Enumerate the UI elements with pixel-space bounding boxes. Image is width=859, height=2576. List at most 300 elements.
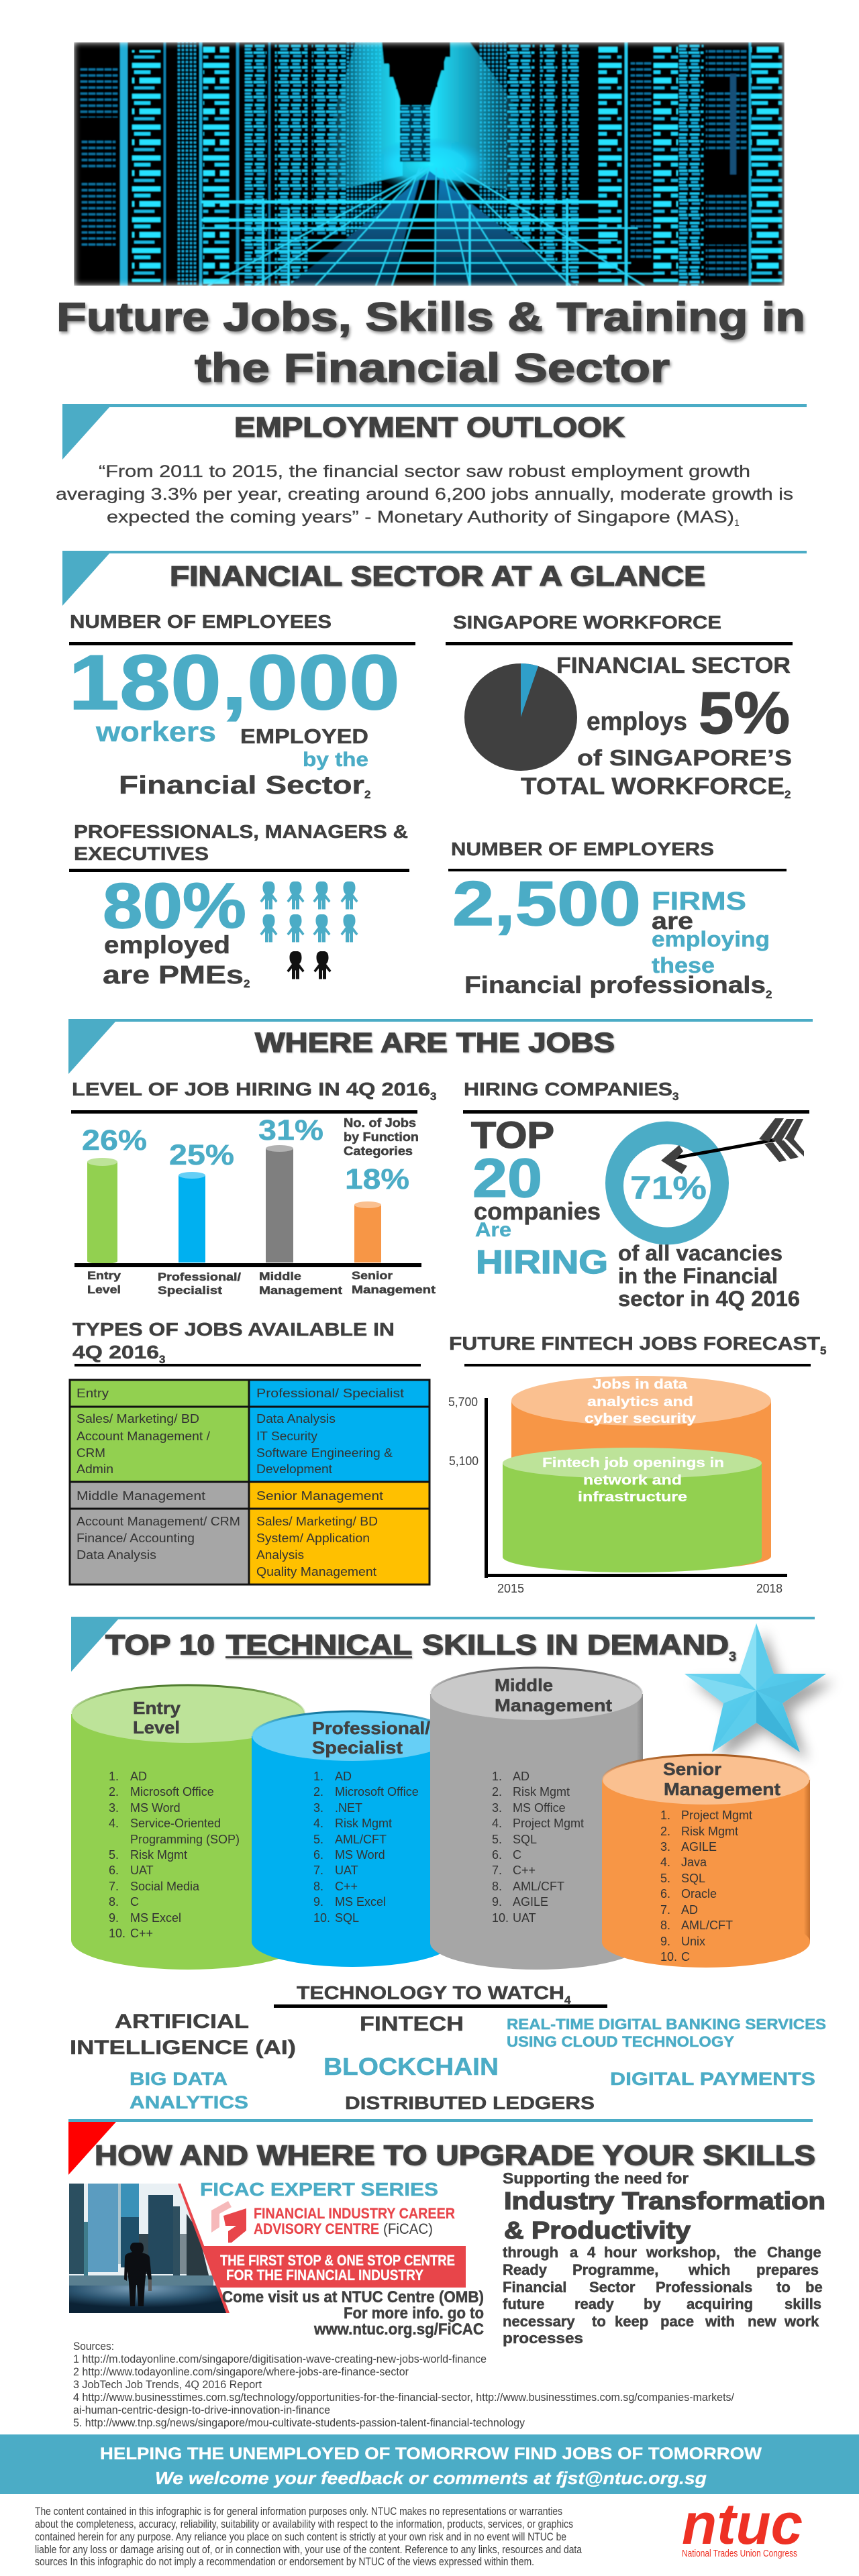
caption: top 20 companies are hiring [471, 1114, 608, 1281]
technology terms: BLOCKCHAIN [323, 2053, 499, 2080]
heading [312, 1718, 430, 1758]
skill list: Project Mgmt [681, 1809, 752, 1822]
skill list: SQL [681, 1872, 705, 1885]
skill list: C [681, 1950, 690, 1964]
axis labels: 5,700 [448, 1395, 478, 1409]
skill list: 8. [492, 1880, 502, 1893]
chart note [344, 1116, 419, 1158]
panel: industry transformation: by [644, 2296, 661, 2312]
visit details: For more info. go to [344, 2304, 484, 2322]
logo text: ADVISORY CENTRE [254, 2220, 379, 2237]
skill list: 8. [660, 1919, 670, 1932]
heading: HOW AND WHERE TO UPGRADE YOUR SKILLS [95, 2139, 815, 2171]
panel: industry transformation: Programme, [572, 2261, 658, 2278]
caption: of all vacancies: of all vacancies [618, 1241, 782, 1265]
bar: middle management [266, 1145, 293, 1263]
caption: these [652, 953, 715, 977]
skill list: 2. [109, 1785, 119, 1799]
cylinder chart [448, 1376, 787, 1595]
skill list: 9. [492, 1895, 502, 1909]
panel: industry transformation: pace [660, 2313, 694, 2330]
axis labels [87, 1269, 436, 1297]
logo text: (FiCAC) [383, 2220, 433, 2237]
axis labels: 2015 [497, 1582, 524, 1595]
technology terms: INTELLIGENCE (AI) [70, 2037, 296, 2059]
technology terms: REAL-TIME DIGITAL BANKING SERVICES [507, 2016, 826, 2033]
percentages: 18% [345, 1163, 409, 1195]
heading [663, 1759, 780, 1799]
jobs table: Admin [77, 1462, 113, 1476]
panel: industry transformation: skills [785, 2296, 821, 2312]
icon: people [260, 881, 358, 979]
logo: FiCAC mark [211, 2201, 246, 2243]
footer band [0, 2434, 859, 2494]
skill list: 1. [109, 1770, 119, 1783]
label: data analytics: cyber security [585, 1411, 697, 1426]
jobs table [70, 1380, 430, 1585]
panel heading: NUMBER OF EMPLOYERS [451, 839, 714, 859]
section rule [68, 2119, 813, 2122]
heading: EMPLOYMENT OUTLOOK [234, 411, 625, 443]
technology terms: USING CLOUD TECHNOLOGY [507, 2033, 734, 2050]
label: fintech openings: infrastructure [578, 1490, 687, 1505]
panel: industry transformation: acquiring [687, 2296, 753, 2312]
label: data analytics: Jobs in data [593, 1377, 688, 1392]
caption: of all vacancies: in the Financial [618, 1264, 778, 1288]
caption: FIRMS [652, 888, 746, 916]
skill list: Risk Mgmt [681, 1825, 738, 1838]
disclaimer: liable for any loss or damage arising out of, or in connection with, your use of the content. Reference to any links, resources and data [35, 2543, 582, 2556]
red corner triangle [68, 2122, 116, 2175]
axis labels: Senior [352, 1269, 393, 1282]
percentages [82, 1114, 409, 1195]
sources: Sources: [73, 2340, 114, 2353]
caption: top 20 companies are hiring: HIRING [476, 1244, 608, 1281]
caption: Financial professionals [464, 972, 766, 998]
caption: EMPLOYED [240, 724, 368, 748]
panel: industry transformation: Professionals [656, 2279, 752, 2296]
jobs table: Data Analysis [77, 1548, 156, 1562]
panel heading: 3 [430, 1090, 436, 1103]
jobs table: Account Management/ CRM [77, 1515, 240, 1528]
skill list: Service-Oriented [130, 1817, 221, 1830]
skill list [313, 1770, 419, 1925]
sources: 4 http://www.businesstimes.com.sg/technology/opportunities-for-the-financial-sector, http://www.businesstimes.com.sg/companies-markets/ [73, 2391, 734, 2404]
skill list: AD [681, 1903, 698, 1917]
skill list: AML/CFT [513, 1880, 564, 1893]
skill list [109, 1770, 240, 1940]
skill list: .NET [335, 1801, 362, 1815]
panel heading: HIRING COMPANIES [464, 1079, 672, 1099]
skill list: Project Mgmt [513, 1817, 584, 1830]
caption [95, 716, 370, 801]
panel: industry transformation: necessary [503, 2313, 575, 2330]
jobs table: Sales/ Marketing/ BD [256, 1515, 378, 1528]
cylinder: network and infrastructure [503, 1448, 762, 1572]
technology terms: FINTECH [360, 2012, 464, 2035]
caption: Financial Sector [119, 771, 364, 800]
skill list: SQL [335, 1911, 359, 1925]
pie chart [464, 663, 577, 771]
section rule and corner triangle [62, 404, 807, 460]
panel: industry transformation: & Productivity [504, 2216, 691, 2244]
big number: 180,000 [68, 639, 400, 726]
technology terms [70, 2010, 826, 2113]
label: fintech openings: Fintech job openings in [542, 1456, 724, 1470]
skill list: 4. [109, 1817, 119, 1830]
section: how and where to upgrade [68, 2119, 825, 2347]
jobs table: Software Engineering & [256, 1446, 393, 1460]
banner title: FICAC EXPERT SERIES [200, 2179, 438, 2200]
panel: industry transformation: Industry Transformation [504, 2187, 825, 2214]
skill list: 9. [313, 1895, 323, 1909]
caption: of SINGAPORE’S [577, 745, 792, 770]
panel heading: NUMBER OF EMPLOYEES [70, 611, 332, 632]
panel heading: 5 [820, 1344, 826, 1357]
icon: arrow [661, 1118, 804, 1174]
jobs table: Entry [77, 1387, 109, 1400]
heading: Senior [663, 1759, 721, 1779]
panel: hiring companies [463, 1079, 809, 1311]
panel: industry transformation: processes [503, 2330, 583, 2347]
panel: industry transformation [503, 2169, 825, 2347]
title: the Financial Sector [195, 345, 670, 390]
skill list: C++ [513, 1864, 536, 1877]
skill list: MS Excel [130, 1911, 181, 1925]
panel: professionals, managers and executives [69, 821, 409, 990]
disclaimer: The content contained in this infographic is for general information purposes only. NTUC makes no representations or warranties [35, 2505, 562, 2518]
skill list: 10. [660, 1950, 677, 1964]
man silhouette [124, 2243, 152, 2306]
section: where are the jobs [68, 1019, 826, 1595]
skill list: 3. [660, 1840, 670, 1854]
red band: THE FIRST STOP & ONE STOP CENTRE [220, 2252, 455, 2269]
caption: top 20 companies are hiring: 20 [472, 1148, 542, 1209]
jobs table: Professional/ Specialist [256, 1387, 404, 1400]
panel: industry transformation: workshop, [646, 2244, 720, 2261]
caption: are [652, 907, 693, 934]
heading: Entry [133, 1698, 181, 1718]
panel: industry transformation: with [705, 2313, 735, 2330]
skill list: AGILE [681, 1840, 717, 1854]
skill list: C [130, 1895, 139, 1909]
axis labels: 2018 [756, 1582, 782, 1595]
chart note: Categories [344, 1144, 413, 1158]
skill list: 9. [109, 1911, 119, 1925]
skill list: Microsoft Office [335, 1785, 419, 1799]
heading: Specialist [312, 1737, 403, 1758]
caption: of all vacancies: sector in 4Q 2016 [618, 1287, 800, 1311]
caption: 2 [766, 988, 772, 1001]
skill list: 10. [492, 1911, 509, 1925]
skill list: SQL [513, 1833, 537, 1846]
section: technology to watch [70, 1982, 826, 2113]
skill list: 1. [660, 1809, 670, 1822]
panel: industry transformation: keep [615, 2313, 648, 2330]
section rule and corner triangle [62, 551, 807, 606]
axis labels: Middle [259, 1270, 301, 1283]
heading: TECHNICAL [226, 1629, 412, 1660]
skill list: AD [513, 1770, 529, 1783]
caption: 2 [785, 788, 791, 801]
panel heading: TYPES OF JOBS AVAILABLE IN [72, 1319, 395, 1340]
bar: senior management [354, 1201, 381, 1263]
logo text: FINANCIAL INDUSTRY CAREER [254, 2205, 455, 2222]
skill list: UAT [335, 1864, 358, 1877]
skill list: 7. [660, 1903, 670, 1917]
red band: FOR THE FINANCIAL INDUSTRY [226, 2267, 423, 2284]
label: fintech openings: network and [583, 1473, 682, 1488]
panel: industry transformation: future [503, 2296, 544, 2312]
skill list: 7. [492, 1864, 502, 1877]
bar chart [74, 1114, 436, 1297]
cylinder: data analytics and cyber security [511, 1376, 771, 1571]
skill list: 3. [109, 1801, 119, 1815]
quote: “From 2011 to 2015, the financial sector saw robust employment growth [99, 462, 750, 481]
heading [105, 1629, 736, 1664]
footer band: HELPING THE UNEMPLOYED OF TOMORROW FIND JOBS OF TOMORROW [100, 2445, 762, 2463]
skill list: AGILE [513, 1895, 548, 1909]
sources: ai-human-centric-design-to-drive-innovation-in-finance [73, 2404, 330, 2416]
sources [73, 2340, 734, 2429]
axis labels: 5,100 [449, 1454, 478, 1468]
skill list: C++ [130, 1927, 153, 1940]
skill list: 4. [660, 1856, 670, 1869]
section: financial sector at a glance [62, 551, 807, 1001]
percentages: 26% [82, 1124, 147, 1157]
panel: industry transformation: be [805, 2279, 823, 2296]
skill list: 5. [109, 1848, 119, 1862]
panel heading: 3 [672, 1090, 678, 1103]
skill list: AD [130, 1770, 147, 1783]
skill list: Unix [681, 1935, 705, 1948]
skill list: Microsoft Office [130, 1785, 214, 1799]
skill list: UAT [513, 1911, 536, 1925]
panel: industry transformation: to [592, 2313, 606, 2330]
heading: TOP 10 [105, 1629, 215, 1660]
percentages: 31% [258, 1114, 323, 1146]
jobs table: Analysis [256, 1548, 304, 1562]
chart note: by Function [344, 1130, 419, 1144]
skill list: 2. [313, 1785, 323, 1799]
logo: ntuc: ntuc [682, 2492, 803, 2557]
skill list: Risk Mgmt [130, 1848, 187, 1862]
chart note: No. of Jobs [344, 1116, 416, 1130]
heading [495, 1675, 612, 1715]
skill list: 6. [492, 1848, 502, 1862]
cylinder: professional / specialist [252, 1711, 453, 1967]
heading: Management [495, 1695, 612, 1715]
caption: TOTAL WORKFORCE [521, 773, 785, 800]
caption: are PMEs [103, 961, 244, 989]
percentages: 25% [169, 1139, 234, 1171]
heading: SKILLS IN DEMAND [422, 1629, 729, 1660]
panel: singapore workforce [446, 612, 793, 801]
quote: 1 [734, 517, 740, 528]
bar: entry level [87, 1158, 117, 1264]
skill list: AML/CFT [335, 1833, 387, 1846]
panel: industry transformation: which [688, 2261, 730, 2278]
skill list: Risk Mgmt [513, 1785, 570, 1799]
cylinder: middle management [430, 1668, 643, 1970]
skill list: MS Excel [335, 1895, 386, 1909]
cylinder: entry level [71, 1685, 305, 1970]
hero image: code corridor [66, 34, 793, 294]
visit details: www.ntuc.org.sg/FiCAC [313, 2320, 484, 2339]
panel: industry transformation: to [776, 2279, 791, 2296]
panel heading: PROFESSIONALS, MANAGERS & [74, 821, 408, 842]
technology terms: ARTIFICIAL [115, 2010, 249, 2033]
skill list: C [513, 1848, 521, 1862]
heading: FINANCIAL SECTOR AT A GLANCE [170, 560, 705, 592]
heading: Level [133, 1717, 180, 1737]
axis labels: Entry [87, 1269, 121, 1282]
skill list: 2. [660, 1825, 670, 1838]
sources: 3 JobTech Job Trends, 4Q 2016 Report [73, 2378, 262, 2391]
heading [133, 1698, 181, 1737]
caption: employing [652, 927, 770, 951]
title: Future Jobs, Skills & Training in [56, 294, 805, 339]
skill list: 9. [660, 1935, 670, 1948]
panel heading: SINGAPORE WORKFORCE [453, 612, 721, 633]
bar: professional [179, 1172, 205, 1263]
skill list: 10. [313, 1911, 330, 1925]
skill list: 10. [109, 1927, 125, 1940]
sources: 2 http://www.todayonline.com/singapore/where-jobs-are-finance-sector [73, 2365, 409, 2378]
heading: TECHNOLOGY TO WATCH [297, 1982, 564, 2003]
jobs table: Middle Management [77, 1489, 205, 1503]
section: employment outlook [56, 404, 807, 528]
skill list: AD [335, 1770, 352, 1783]
jobs table: Development [256, 1462, 332, 1476]
caption: employs [587, 708, 687, 736]
panel: industry transformation: the [734, 2244, 756, 2261]
heading: Middle [495, 1675, 553, 1695]
jobs table: Sales/ Marketing/ BD [77, 1412, 199, 1426]
skill list: Oracle [681, 1887, 717, 1900]
panel: industry transformation: hour [604, 2244, 637, 2261]
caption: top 20 companies are hiring: companies [474, 1197, 601, 1225]
panel: industry transformation: a [570, 2244, 578, 2261]
icon: star [685, 1623, 826, 1752]
disclaimer [35, 2505, 582, 2568]
caption [103, 931, 250, 990]
technology terms: DISTRIBUTED LEDGERS [345, 2093, 595, 2113]
skill list: MS Office [513, 1801, 566, 1815]
cylinder: senior management [602, 1755, 810, 1968]
technology terms: ANALYTICS [130, 2092, 248, 2112]
axis labels: Level [87, 1283, 121, 1296]
caption: 5% [699, 680, 790, 746]
skill list: 2. [492, 1785, 502, 1799]
jobs table: System/ Application [256, 1532, 370, 1545]
panel: types of jobs [70, 1319, 430, 1585]
jobs table: CRM [77, 1446, 105, 1460]
caption: employed [104, 931, 230, 959]
technology terms: BIG DATA [130, 2069, 228, 2089]
donut value: 71% [630, 1171, 707, 1206]
skill list: Programming (SOP) [130, 1833, 240, 1846]
caption: by the [303, 749, 368, 771]
caption: workers [95, 716, 216, 747]
skill list: 8. [313, 1880, 323, 1893]
skill list: Java [681, 1856, 707, 1869]
axis labels: Specialist [158, 1284, 222, 1297]
heading: Professional/ [312, 1718, 430, 1738]
caption: top 20 companies are hiring: Are [475, 1219, 511, 1241]
skill list: 1. [313, 1770, 323, 1783]
caption: FINANCIAL SECTOR [556, 653, 791, 678]
sources: 5. http://www.tnp.sg/news/singapore/mou-cultivate-students-passion-talent-financial-technology [73, 2416, 525, 2429]
panel: industry transformation: Sector [589, 2279, 636, 2296]
skill list: 6. [109, 1864, 119, 1877]
panel heading [72, 1319, 395, 1366]
panel: industry transformation: ready [574, 2296, 614, 2312]
heading: 4 [564, 1994, 571, 2006]
section: top 10 technical skills [71, 1617, 826, 1970]
axis labels: Professional/ [158, 1271, 241, 1283]
sources: 1 http://m.todayonline.com/singapore/digitisation-wave-creating-new-jobs-world-finance [73, 2353, 487, 2365]
skill list: MS Word [130, 1801, 181, 1815]
skill list: UAT [130, 1864, 154, 1877]
panel: industry transformation: Financial [503, 2279, 566, 2296]
panel heading: EXECUTIVES [74, 843, 209, 864]
skill list: 3. [492, 1801, 502, 1815]
section rule and corner triangle [71, 1617, 815, 1672]
skill list: 8. [109, 1895, 119, 1909]
skill list: 7. [109, 1880, 119, 1893]
heading: Management [664, 1779, 780, 1799]
skill list: 7. [313, 1864, 323, 1877]
skill list [660, 1809, 752, 1964]
visit details [222, 2288, 484, 2339]
disclaimer: contained herein for any purpose. Any reliance you place on such content is strictly at your own risk and in no event will NTUC be [35, 2530, 566, 2543]
skill list: 3. [313, 1801, 323, 1815]
panel: industry transformation: Ready [503, 2261, 548, 2278]
footer band: We welcome your feedback or comments at fjst@ntuc.org.sg [155, 2468, 707, 2488]
red band [203, 2246, 466, 2288]
panel: industry transformation: prepares [756, 2261, 819, 2278]
skill list: 1. [492, 1770, 502, 1783]
logo: ntuc: National Trades Union Congress [682, 2548, 797, 2559]
logo text [254, 2205, 455, 2237]
caption: 2 [244, 977, 250, 990]
caption: top 20 companies are hiring: TOP [471, 1114, 554, 1156]
label: fintech openings [542, 1456, 724, 1505]
panel: industry transformation: new [748, 2313, 777, 2330]
jobs table: Quality Management [256, 1565, 376, 1578]
technology terms: DIGITAL PAYMENTS [610, 2069, 815, 2089]
disclaimer: about the completeness, accuracy, reliability, suitability or availability with respect to the information, products, services, or graphics [35, 2518, 573, 2530]
panel heading: FUTURE FINTECH JOBS FORECAST [449, 1333, 820, 1354]
panel: industry transformation: through [503, 2244, 558, 2261]
panel: ficac banner [69, 2179, 484, 2339]
big number: 2,500 [452, 868, 641, 938]
skill list: Social Media [130, 1880, 200, 1893]
caption [464, 888, 772, 1001]
panel: industry transformation: work [784, 2313, 819, 2330]
panel: future fintech jobs forecast [448, 1333, 826, 1595]
label: data analytics: analytics and [587, 1395, 693, 1409]
skill list [492, 1770, 584, 1925]
heading: 3 [729, 1650, 736, 1664]
disclaimer: sources In this infographic do not imply a recommendation or endorsement by NTUC of the views expressed within them. [35, 2555, 534, 2568]
big number: 80% [103, 870, 246, 942]
quote: expected the coming years” - Monetary Authority of Singapore (MAS) [107, 508, 734, 527]
skill list: 5. [313, 1833, 323, 1846]
section rule and corner triangle [68, 1019, 813, 1074]
donut chart [605, 1122, 729, 1245]
